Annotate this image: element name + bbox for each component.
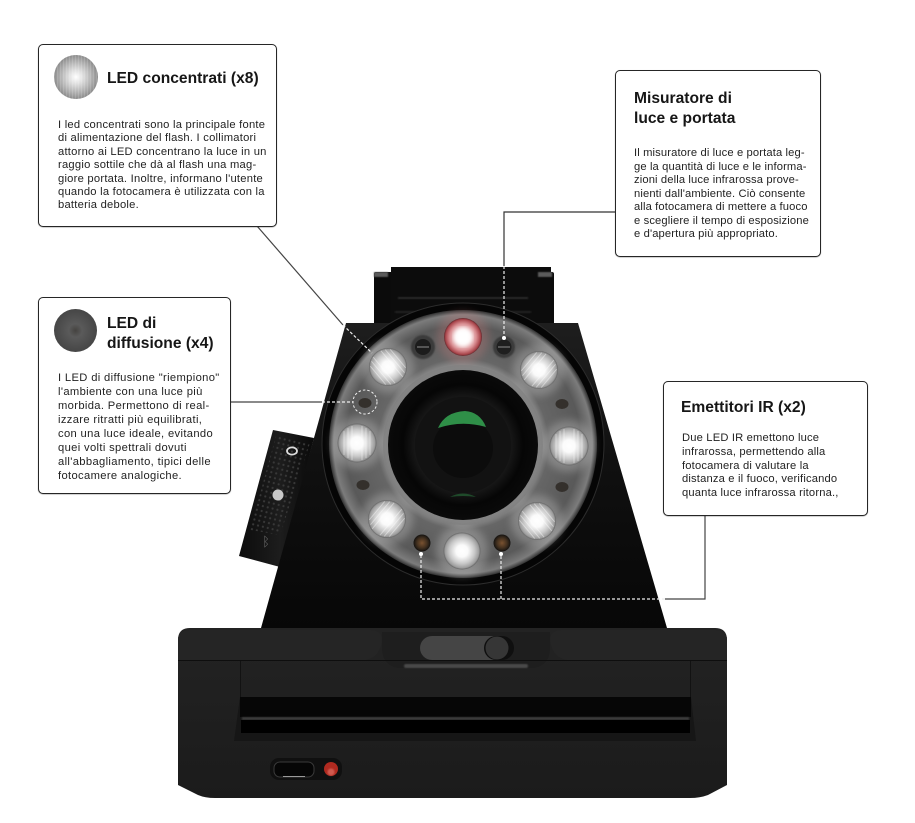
text: LED concentrati: attorno ai LED concentrano la luce in un <box>58 146 267 158</box>
concentrated LEDs <box>338 318 588 570</box>
panel: LED di diffusione <box>38 297 231 494</box>
text: LED di diffusione: l'ambiente con una luce più <box>58 386 203 398</box>
text: Emettitori IR: Due LED IR emettono luce <box>682 432 819 444</box>
panel: LED concentrati <box>38 44 277 227</box>
text: Misuratore di luce e portata: ge la quantità di luce e le informa- <box>634 160 807 172</box>
usb port and indicator light <box>270 758 342 780</box>
text: Emettitori IR: fotocamera di valutare la <box>682 460 809 472</box>
panel: Emettitori IR <box>663 381 868 516</box>
text: Misuratore di luce e portata: e d'apertura più appropriato. <box>634 228 778 240</box>
heading: Misuratore di luce e portata: Misuratore di <box>634 90 732 107</box>
text: LED di diffusione: quei volti spettrali dovuti <box>58 442 187 454</box>
heading: Misuratore di luce e portata <box>634 90 736 127</box>
text: Misuratore di luce e portata: nienti dall'ambiente. Ciò consente <box>634 188 805 200</box>
text: LED concentrati: giore portata. Inoltre, informano l'utente <box>58 173 263 185</box>
text: LED concentrati: di alimentazione del flash. I collimatori <box>58 132 256 144</box>
flash hinge top <box>374 267 554 332</box>
heading: LED concentrati: LED concentrati (x8) <box>107 70 259 87</box>
text: Misuratore di luce e portata <box>634 147 809 240</box>
text: LED di diffusione: morbida. Permettono di real- <box>58 400 210 412</box>
leader: IR emitters <box>419 516 705 599</box>
heading: LED di diffusione: diffusione (x4) <box>107 335 214 352</box>
text: LED concentrati: raggio sottile che dà al flash una mag- <box>58 159 256 171</box>
text: LED concentrati: batteria debole. <box>58 199 139 211</box>
leader: light meter <box>502 212 615 340</box>
text: LED di diffusione: izzare ritratti più equilibrati, <box>58 414 202 426</box>
icon: concentrated LED <box>54 55 98 99</box>
side dial: ᛒ <box>262 535 270 550</box>
heading: LED di diffusione <box>107 315 214 352</box>
leader: diffusion LED <box>231 390 377 414</box>
text: LED di diffusione <box>58 372 220 482</box>
text: Misuratore di luce e portata: zioni della luce infrarossa prove- <box>634 174 799 186</box>
heading: Misuratore di luce e portata: luce e portata <box>634 110 735 127</box>
text: LED di diffusione: all'abbagliamento, tipici delle <box>58 456 211 468</box>
camera body <box>261 323 667 628</box>
flash ring <box>322 303 604 585</box>
text: Emettitori IR <box>682 432 839 499</box>
text: Emettitori IR: distanza e il fuoco, verificando <box>682 473 837 485</box>
side dial <box>239 430 314 567</box>
leader: concentrated LED <box>257 226 372 353</box>
sensors and diffusion LEDs <box>356 335 568 552</box>
text: Emettitori IR: quanta luce infrarossa ritorna., <box>682 487 839 499</box>
text: Emettitori IR: infrarossa, permettendo alla <box>682 446 825 458</box>
text: Misuratore di luce e portata: Il misuratore di luce e portata leg- <box>634 147 805 159</box>
text: LED concentrati: quando la fotocamera è utilizzata con la <box>58 186 265 198</box>
text: Misuratore di luce e portata: alla fotocamera di mettere a fuoco <box>634 201 808 213</box>
text: LED di diffusione: con una luce ideale, evitando <box>58 428 213 440</box>
lens <box>383 365 543 525</box>
camera base <box>178 628 727 798</box>
panel: Misuratore di luce e portata <box>615 70 821 257</box>
heading: LED di diffusione: LED di <box>107 315 156 332</box>
text: LED concentrati: I led concentrati sono la principale fonte <box>58 119 265 131</box>
heading: Emettitori IR: Emettitori IR (x2) <box>681 399 806 416</box>
icon: diffusion LED <box>54 309 97 352</box>
text: Misuratore di luce e portata: e scegliere il tempo di esposizione <box>634 214 809 226</box>
text: LED concentrati <box>58 119 267 211</box>
text: LED di diffusione: I LED di diffusione "riempiono" <box>58 372 220 384</box>
text: LED di diffusione: fotocamere analogiche. <box>58 470 182 482</box>
